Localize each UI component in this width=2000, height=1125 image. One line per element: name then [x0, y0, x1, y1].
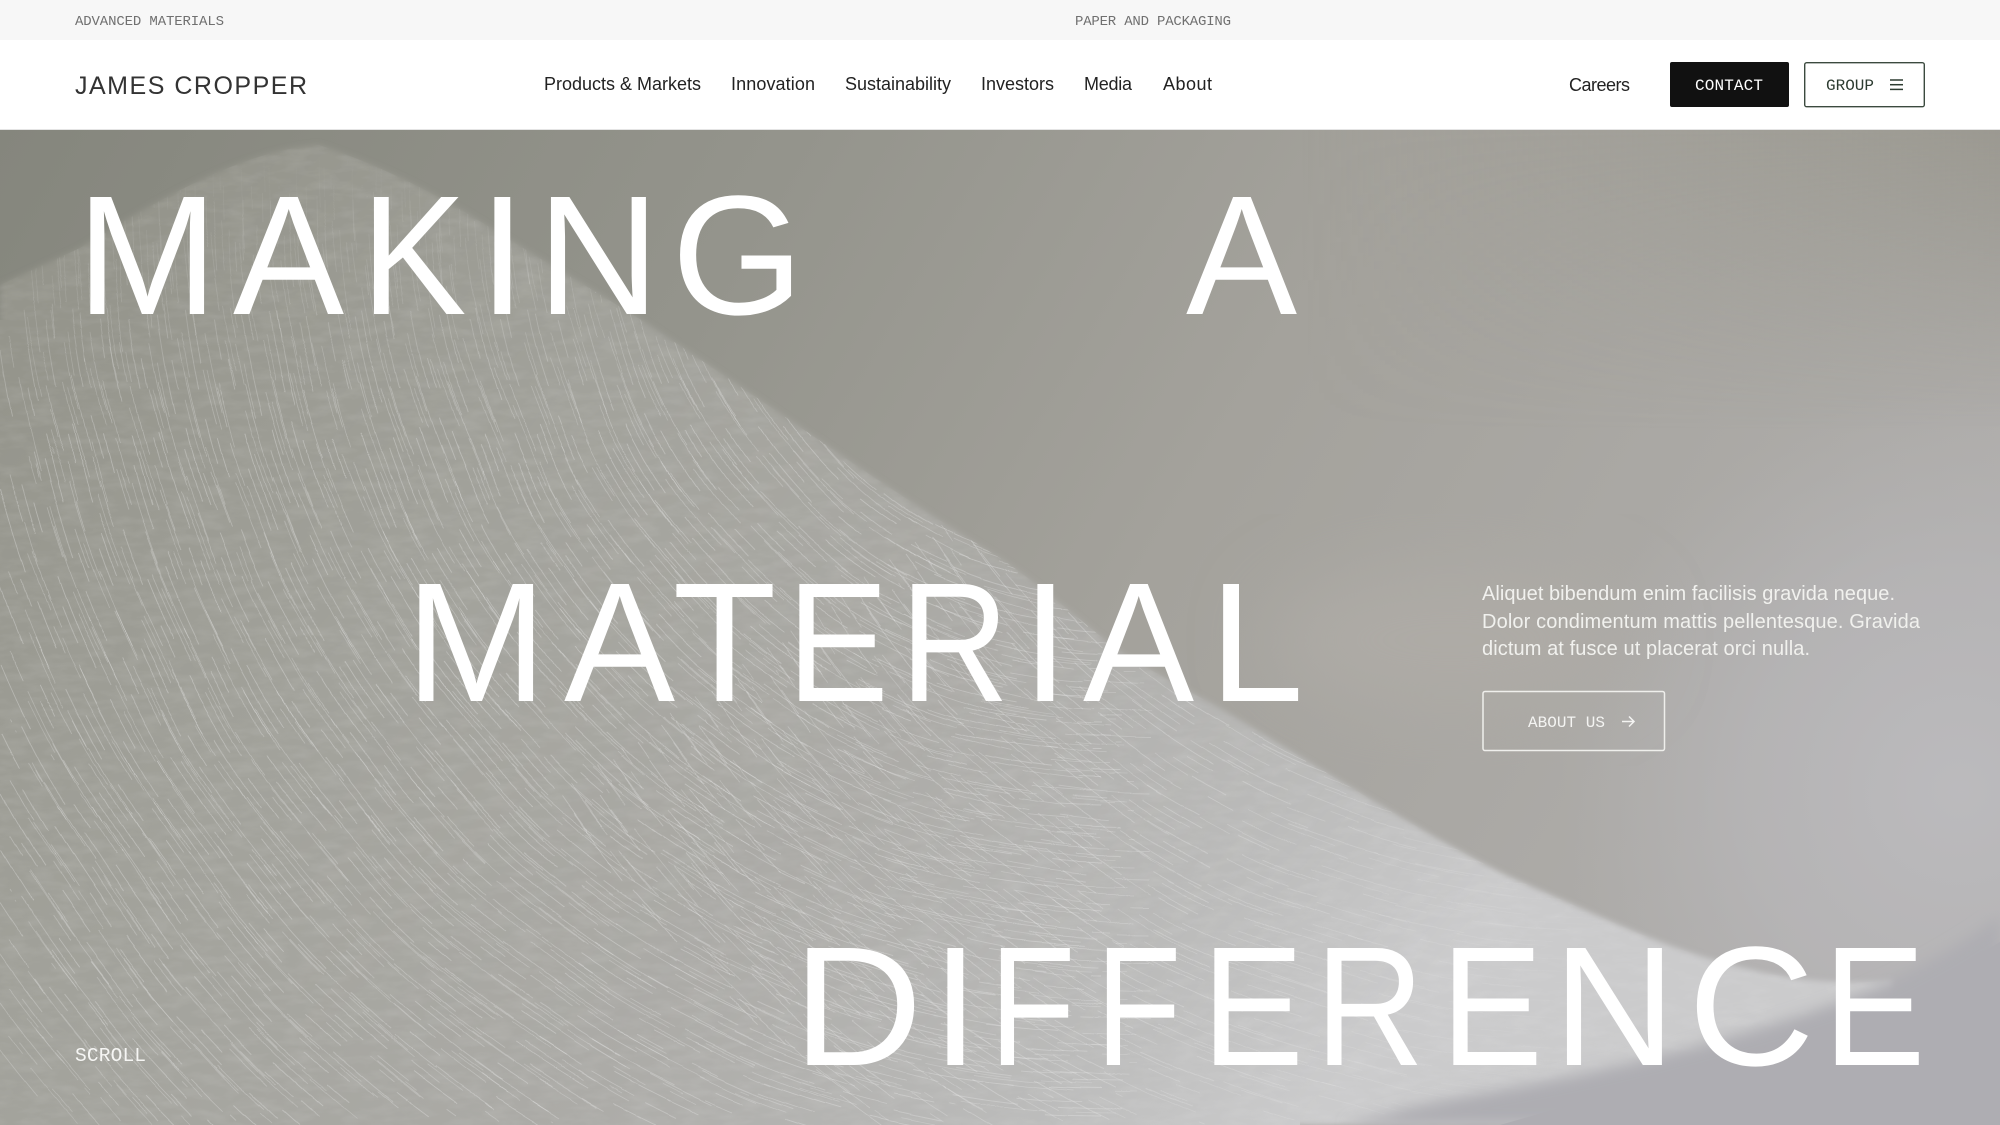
icon: hamburger [1890, 80, 1903, 89]
headline word: material: A [1083, 547, 1194, 737]
headline word: difference: I [932, 912, 979, 1102]
nav links: Investors [981, 74, 1054, 94]
intro paragraph [1482, 583, 1921, 660]
headline word: difference: N [1553, 912, 1676, 1102]
headline word: material: E [787, 549, 889, 738]
headline word: making [76, 160, 804, 351]
group menu button [1805, 63, 1924, 107]
nav links: Media [1084, 74, 1133, 94]
icon: arrow [1622, 716, 1634, 726]
contact button: CONTACT [1695, 77, 1763, 95]
headline word: making: M [76, 161, 218, 351]
headline word: making: G [672, 161, 804, 351]
nav links [544, 74, 1212, 94]
about us button [1483, 692, 1664, 750]
label: advanced materials: ADVANCED MATERIALS [75, 14, 224, 30]
headline word: material: A [564, 547, 675, 737]
nav links: Products & Markets [544, 74, 701, 94]
intro paragraph: Aliquet bibendum enim facilisis gravida neque. [1482, 583, 1895, 605]
logo wordmark: JAMES CROPPER [75, 72, 307, 100]
headline word: difference: E [1823, 913, 1925, 1102]
headline word: difference: E [1202, 913, 1304, 1102]
headline word: difference: F [989, 913, 1075, 1102]
headline word: material: T [673, 548, 776, 738]
group menu button: GROUP [1826, 77, 1874, 95]
about us button: ABOUT US [1528, 714, 1605, 732]
headline word: difference: D [793, 912, 923, 1102]
headline word: material [405, 547, 1304, 738]
headline word: difference: C [1688, 911, 1814, 1101]
headline word: difference: F [1095, 913, 1181, 1102]
headline word: making: A [233, 160, 344, 350]
headline word: difference [793, 911, 1925, 1102]
intro paragraph: dictum at fusce ut placerat orci nulla. [1482, 638, 1810, 660]
headline word: material: R [900, 548, 1009, 738]
main navigation header [0, 40, 2000, 130]
headline word: material: L [1209, 548, 1304, 738]
headline: making a material difference [76, 160, 1925, 1102]
contact button [1670, 62, 1789, 107]
headline word: making: N [537, 161, 660, 351]
headline word: difference: R [1315, 912, 1424, 1102]
headline word: difference: E [1441, 913, 1543, 1102]
top utility bar [0, 0, 2000, 40]
nav links: Sustainability [845, 74, 951, 94]
nav links: About [1163, 74, 1212, 94]
headline word: a: A [1186, 160, 1297, 350]
nav links: Innovation [731, 74, 815, 94]
headline word: material: I [1022, 548, 1069, 738]
headline word: making: K [361, 160, 466, 350]
headline word: making: I [479, 161, 526, 351]
careers link: Careers [1569, 75, 1630, 95]
headline word: material: M [405, 548, 547, 738]
intro paragraph: Dolor condimentum mattis pellentesque. Gravida [1482, 611, 1921, 633]
scroll label: SCROLL [75, 1045, 146, 1067]
label: paper and packaging: PAPER AND PACKAGING [1075, 14, 1231, 30]
